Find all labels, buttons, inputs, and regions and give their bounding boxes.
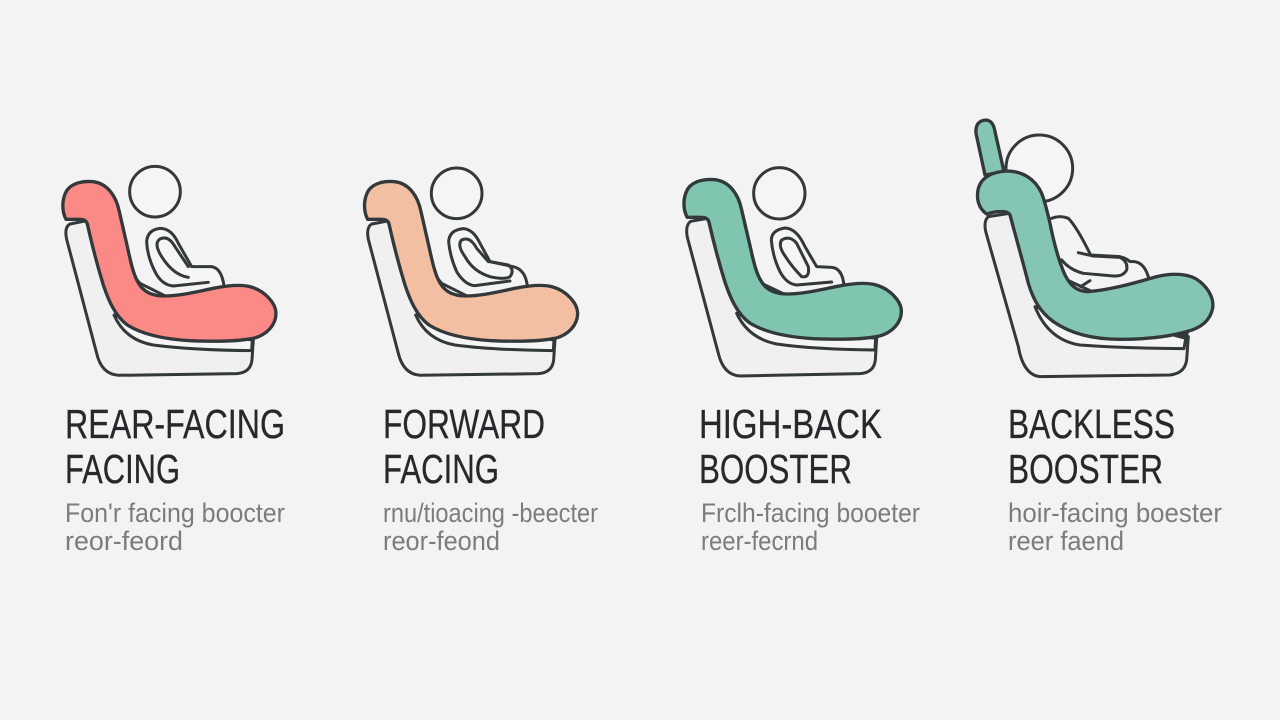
icon: headrest post [976, 120, 1004, 175]
text: rear-facing description: Fon'r facing boocter [65, 498, 285, 528]
heading: high-back booster [699, 401, 882, 492]
text: backless booster description [1008, 498, 1222, 556]
heading: forward facing: FACING [383, 446, 499, 492]
text: forward facing description: reor-feond [383, 526, 500, 556]
icon: backless booster seat with headrest post [976, 120, 1213, 377]
heading: high-back booster: BOOSTER [699, 446, 852, 492]
text: backless booster description: reer faend [1008, 526, 1124, 556]
heading: forward facing: FORWARD [383, 401, 545, 447]
text: high-back booster description: reer-fecrnd [701, 526, 818, 556]
label: high-back booster [699, 401, 920, 556]
text: rear-facing description [65, 498, 285, 556]
icon: forward-facing seat [364, 168, 578, 375]
heading: rear-facing: REAR-FACING [65, 401, 285, 447]
heading: rear-facing: FACING [65, 446, 180, 492]
text: forward facing description: rnu/tioacing -beecter [383, 498, 598, 528]
text: high-back booster description [701, 498, 920, 556]
label: forward facing [383, 401, 598, 556]
heading: forward facing [383, 401, 545, 492]
text: backless booster description: hoir-facing boester [1008, 498, 1222, 528]
heading: backless booster: BOOSTER [1008, 446, 1163, 492]
heading: rear-facing [65, 401, 285, 492]
icon: high-back booster seat [684, 168, 901, 376]
label: rear-facing [65, 401, 285, 556]
label: backless booster [1008, 401, 1222, 556]
heading: high-back booster: HIGH-BACK [699, 401, 882, 447]
text: rear-facing description: reor-feord [65, 526, 183, 556]
heading: backless booster: BACKLESS [1008, 401, 1175, 447]
text: high-back booster description: Frclh-facing booeter [701, 498, 920, 528]
text: forward facing description [383, 498, 598, 556]
heading: backless booster [1008, 401, 1175, 492]
icon: rear-facing seat [63, 166, 276, 375]
